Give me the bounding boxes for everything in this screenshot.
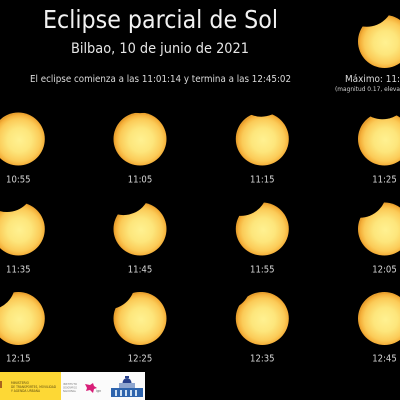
ministry name: DE TRANSPORTES, MOVILIDAD [11,385,56,389]
ministry name: Y AGENDA URBANA [11,389,41,393]
magnitude note: (magnitud 0.17, eleva [335,86,400,93]
sun 12:35 [236,292,289,362]
ministry name: MINISTERIO [11,381,29,385]
sun 11:45 [114,203,166,272]
ministry crest [0,381,2,388]
sun 10:55: 10:55 [6,174,31,186]
sun 12:45 [358,292,400,364]
sun 11:05: 11:05 [128,174,152,186]
title: Eclipse parcial de Sol [43,5,278,34]
institute name: NACIONAL [63,389,76,393]
sun 11:25: 11:25 [372,174,397,186]
sun 12:05 [358,202,400,272]
sun 11:45: 11:45 [128,264,152,276]
logo strip [0,372,145,400]
sun 11:05 [114,112,166,182]
institute name: GEOGRÁFICO [63,384,78,390]
subtitle: Bilbao, 10 de junio de 2021 [71,41,249,57]
sun 12:45: 12:45 [372,354,397,364]
sun 12:35: 12:35 [250,354,275,364]
institute name [63,382,78,393]
ministry name [11,381,56,393]
sun 11:15 [236,114,289,182]
sun 12:15 [0,292,45,362]
sun 11:55: 11:55 [250,264,275,276]
pink logo [85,383,101,393]
eclipse start and end times: El eclipse comienza a las 11:01:14 y termina a las 12:45:02 [30,74,291,85]
sun 12:25: 12:25 [128,354,152,364]
sun 10:55 [0,112,45,186]
sun 12:15: 12:15 [6,354,31,364]
sun 11:25 [358,116,400,182]
sun 11:35: 11:35 [6,264,31,276]
institute name: INSTITUTO [63,382,78,386]
sun 11:15: 11:15 [250,174,275,186]
pink logo: ign [96,389,101,393]
sun 12:25 [114,292,166,362]
sun 11:35 [0,204,45,272]
sun 11:55 [236,202,289,272]
sun 12:05: 12:05 [372,264,397,276]
sun at eclipse maximum [358,15,400,68]
observatory logo [111,376,143,397]
